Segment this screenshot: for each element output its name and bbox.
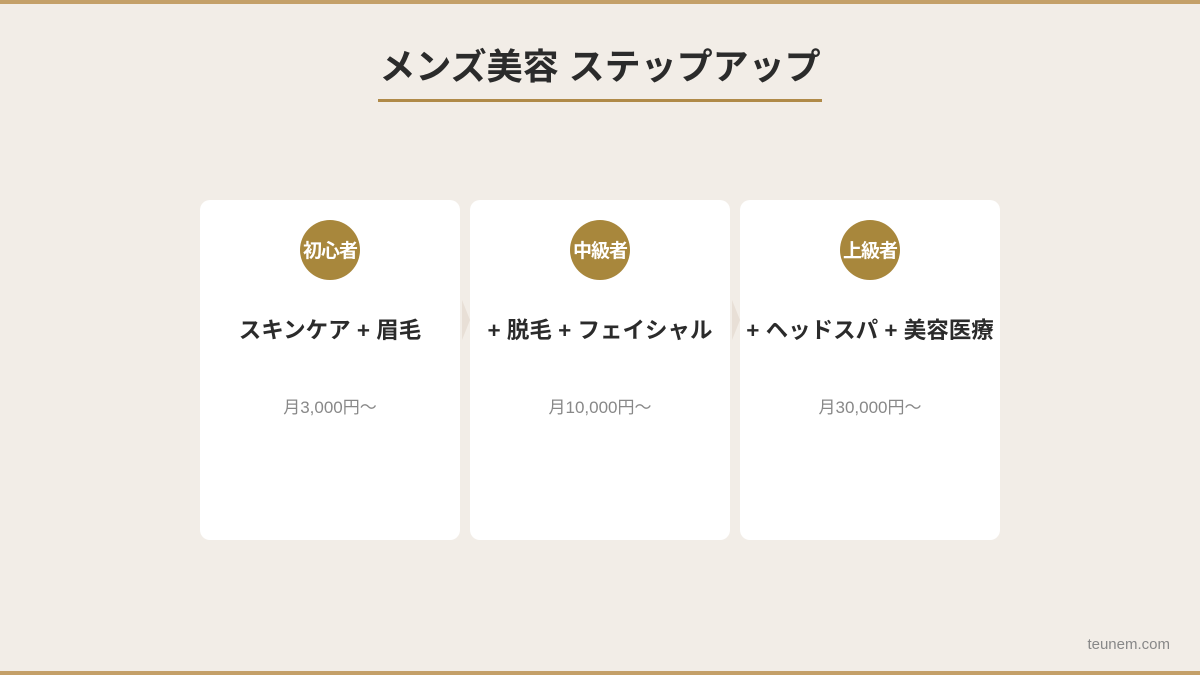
badge: 中級者 — [570, 220, 630, 280]
title: メンズ美容 ステップアップ — [379, 46, 821, 87]
text: beginner price: 月3,000円〜 — [283, 398, 377, 417]
arrow 2 — [732, 300, 740, 340]
text: intermediate items: + 脱毛 + フェイシャル — [487, 318, 713, 343]
badge: 初心者 — [300, 220, 360, 280]
footer: site: teunem.com — [1087, 636, 1170, 653]
badge: 中級者: 中級者 — [573, 241, 627, 262]
text: intermediate price: 月10,000円〜 — [548, 398, 652, 417]
panel: advanced — [740, 200, 1000, 540]
panel: beginner — [200, 200, 460, 540]
badge: 上級者 — [840, 220, 900, 280]
panel: intermediate — [470, 200, 730, 540]
text: advanced items: + ヘッドスパ + 美容医療 — [746, 318, 994, 343]
arrow 1 — [462, 300, 470, 340]
badge: 初心者: 初心者 — [303, 241, 357, 262]
badge: 上級者: 上級者 — [843, 241, 897, 262]
text: beginner items: スキンケア + 眉毛 — [239, 318, 421, 343]
text: advanced price: 月30,000円〜 — [818, 398, 922, 417]
